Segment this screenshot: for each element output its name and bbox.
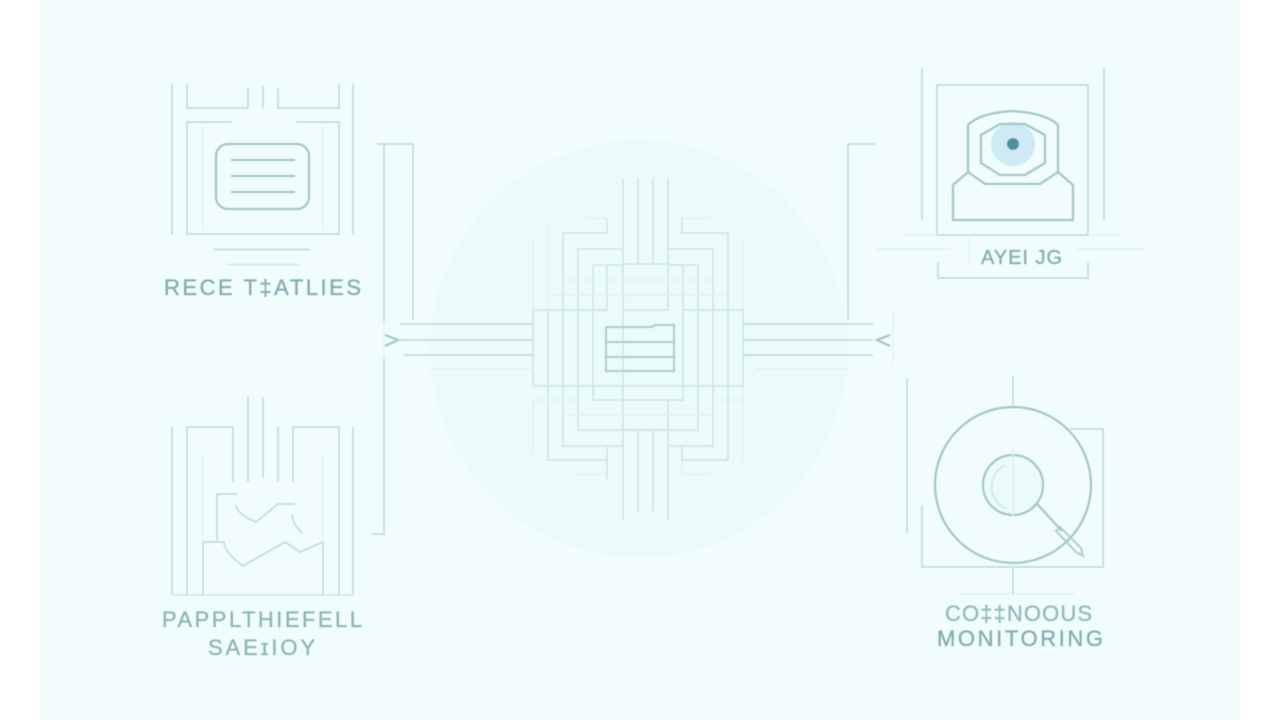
icon: map shape — [203, 494, 323, 595]
heading: recent treaties: RECE T‡ATLIES — [164, 275, 361, 300]
panel: analysing — [877, 68, 1145, 278]
panel: pathfield safety — [162, 397, 362, 660]
icon: camera frame — [877, 68, 1145, 278]
heading: monitoring: MONITORING — [937, 626, 1103, 651]
panel: recent treaties — [164, 84, 361, 300]
heading: analysing: AYEI JG — [981, 247, 1062, 269]
central circuit icon — [533, 178, 743, 520]
right connector arrow — [743, 144, 893, 369]
central circle — [430, 140, 848, 558]
panel: continuous monitoring — [907, 376, 1103, 651]
icon: monitoring frame — [907, 376, 1103, 595]
heading: pathfield safety: PAPPLTHIEFELL — [162, 607, 362, 632]
icon: document card frame — [172, 84, 353, 264]
icon: eye camera — [953, 111, 1073, 220]
icon: magnifier on disc — [935, 407, 1091, 563]
diagram — [162, 68, 1145, 660]
icon: document card — [216, 144, 309, 209]
subheading: pathfield safety: SAEɪIOY — [208, 635, 315, 660]
left connector arrow — [372, 144, 533, 534]
heading: continuous: CO‡‡NOOUS — [945, 601, 1092, 626]
central folder icon — [606, 325, 674, 371]
icon: map frame — [172, 397, 353, 595]
